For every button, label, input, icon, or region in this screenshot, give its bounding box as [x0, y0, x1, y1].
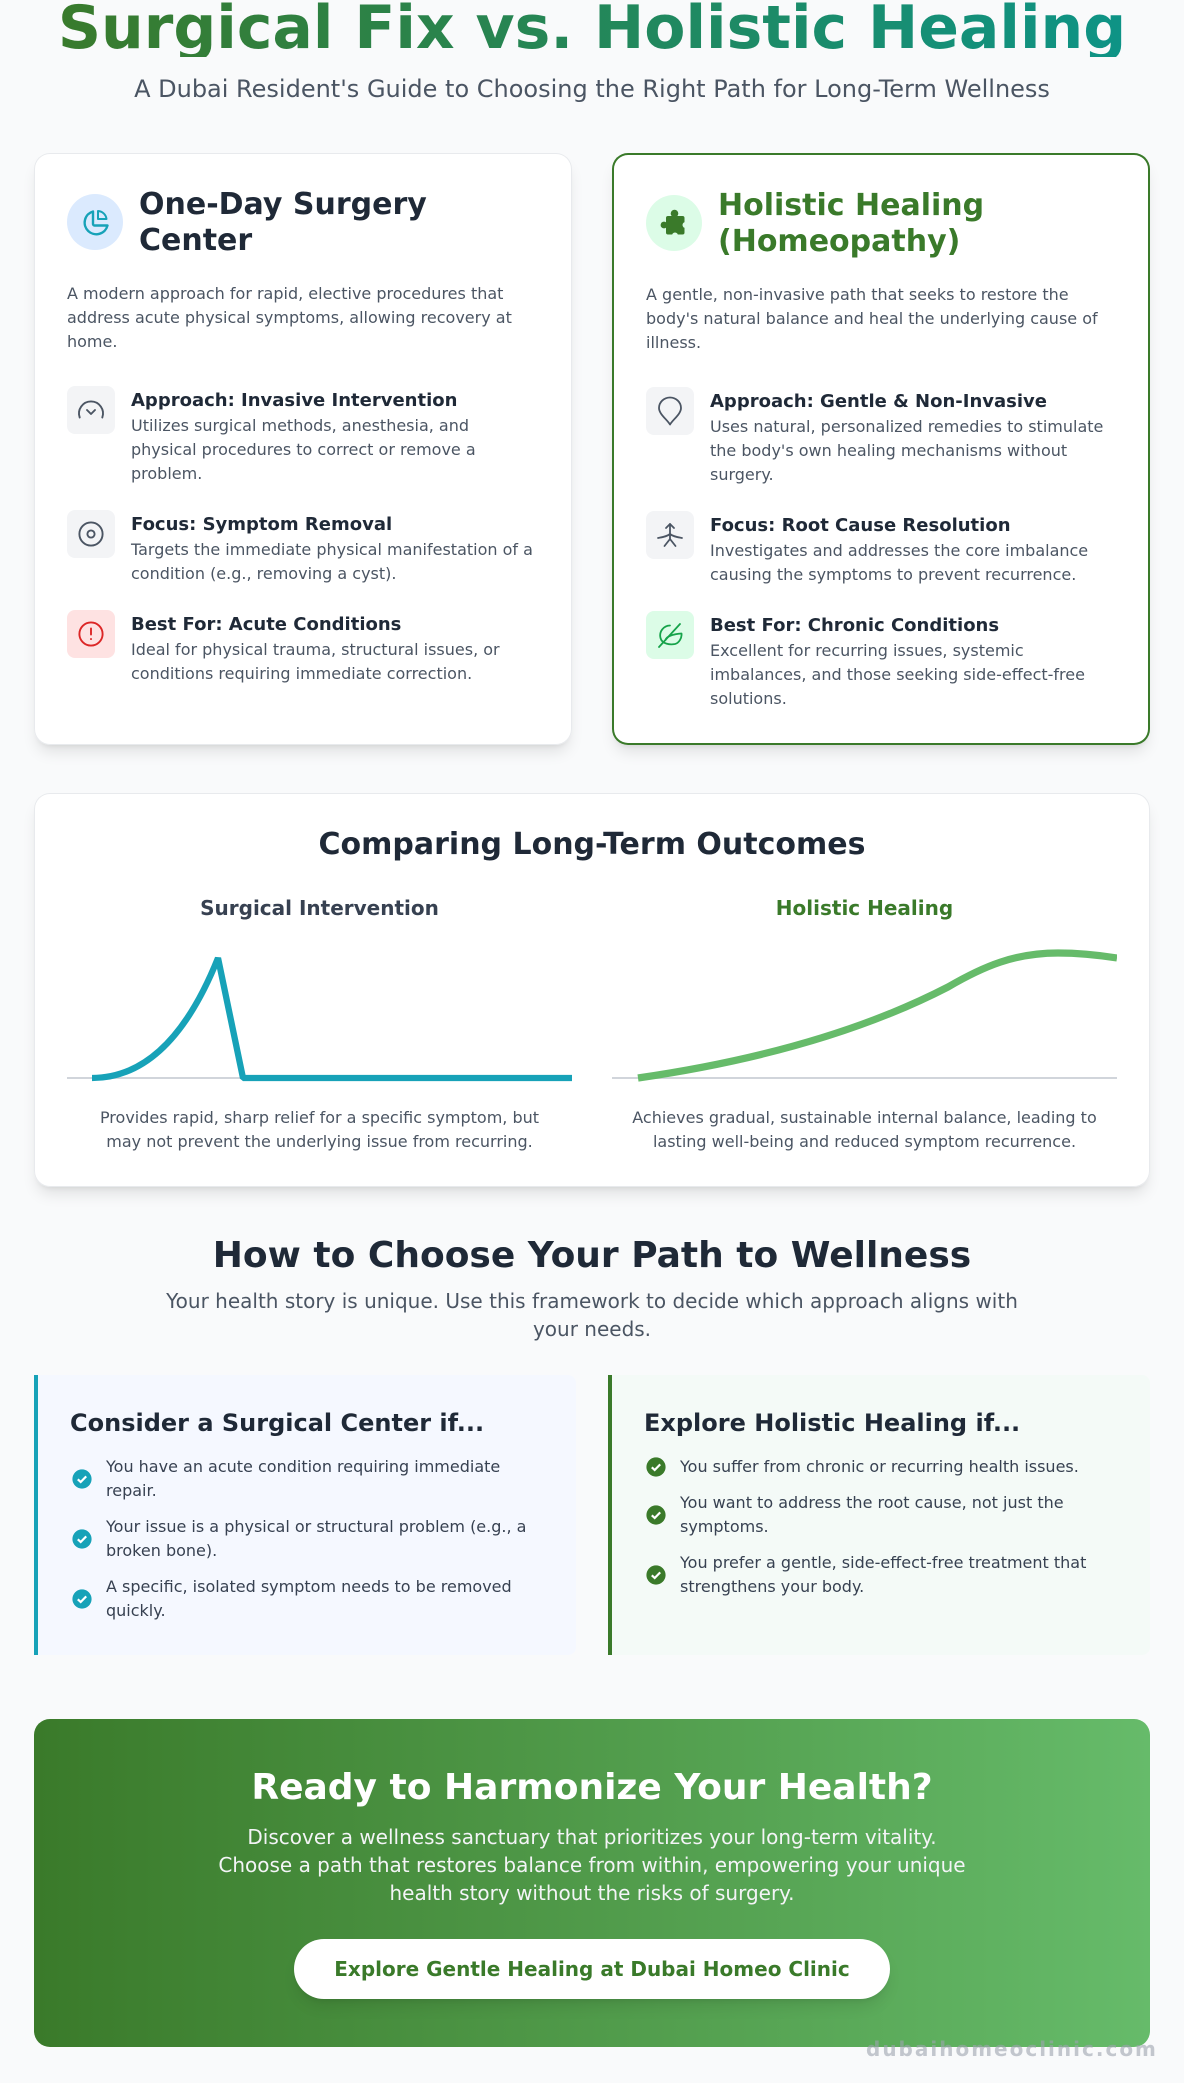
list text: strengthens your body.	[680, 1577, 864, 1596]
heading: surgery center	[139, 187, 427, 258]
chart caption	[100, 1108, 539, 1151]
item text	[131, 416, 476, 483]
icon: target	[67, 510, 115, 558]
icon: check	[646, 1565, 666, 1585]
item text: solutions.	[710, 689, 787, 708]
list item	[72, 1577, 512, 1620]
icon: check	[72, 1589, 92, 1609]
cta text: Choose a path that restores balance from within, empowering your unique	[218, 1853, 966, 1877]
description: A gentle, non-invasive path that seeks to restore the	[646, 285, 1069, 304]
chart heading: Surgical Intervention	[200, 896, 439, 920]
list text: repair.	[106, 1481, 157, 1500]
heading: surgery center: One-Day Surgery	[139, 187, 427, 222]
list item	[72, 1517, 526, 1560]
item: best for	[646, 611, 1085, 708]
item text: Investigates and addresses the core imbalance	[710, 541, 1088, 560]
item text: Utilizes surgical methods, anesthesia, and	[131, 416, 469, 435]
heading: holistic healing	[718, 188, 984, 259]
item: focus	[646, 511, 1088, 584]
list item	[646, 1457, 1079, 1477]
item text: imbalances, and those seeking side-effect-free	[710, 665, 1085, 684]
cta text: Discover a wellness sanctuary that prioritizes your long-term vitality.	[247, 1825, 937, 1849]
item title: Focus: Symptom Removal	[131, 514, 392, 535]
item: approach	[646, 387, 1103, 484]
chart caption: may not prevent the underlying issue from recurring.	[106, 1132, 533, 1151]
item: focus	[67, 510, 533, 583]
item text	[131, 640, 500, 683]
item text: Targets the immediate physical manifestation of a	[131, 540, 533, 559]
list text: You want to address the root cause, not just the	[680, 1493, 1064, 1512]
list text	[680, 1553, 1086, 1596]
panel: one-day surgery center	[34, 153, 572, 745]
list text	[680, 1493, 1064, 1536]
icon: alert	[67, 610, 115, 658]
panel: holistic healing	[612, 153, 1150, 745]
intro text	[166, 1289, 1018, 1341]
cta heading: Ready to Harmonize Your Health?	[251, 1767, 933, 1808]
item text: the body's own healing mechanisms without	[710, 441, 1067, 460]
subtitle: A Dubai Resident's Guide to Choosing the Right Path for Long-Term Wellness	[134, 75, 1050, 103]
item text: Uses natural, personalized remedies to stimulate	[710, 417, 1103, 436]
item text: Ideal for physical trauma, structural issues, or	[131, 640, 500, 659]
chart caption	[632, 1108, 1097, 1151]
item text	[710, 417, 1103, 484]
item text	[130, 540, 533, 583]
watermark: dubaihomeoclinic.com	[866, 2037, 1158, 2061]
list text: broken bone).	[106, 1541, 217, 1560]
icon: leaf	[646, 611, 694, 659]
icon: drop	[646, 387, 694, 435]
panel: comparing long-term outcomes	[34, 793, 1150, 1187]
column: holistic healing	[612, 896, 1117, 1151]
heading: holistic healing: Holistic Healing	[718, 188, 984, 223]
intro text: Your health story is unique. Use this framework to decide which approach aligns with	[166, 1289, 1018, 1313]
description: address acute physical symptoms, allowing recovery at	[67, 308, 512, 327]
item title: Focus: Root Cause Resolution	[710, 515, 1011, 536]
list item	[646, 1493, 1064, 1536]
chart: gradual rise	[612, 949, 1117, 1082]
heading: holistic healing: (Homeopathy)	[718, 224, 960, 259]
cta text: health story without the risks of surgery.	[389, 1881, 795, 1905]
heading: surgery center: Center	[139, 223, 252, 258]
item: approach	[67, 386, 476, 483]
list text: A specific, isolated symptom needs to be removed	[106, 1577, 512, 1596]
item text: problem.	[131, 464, 202, 483]
heading: how to choose: How to Choose Your Path to Wellness	[213, 1235, 971, 1276]
list text	[106, 1457, 500, 1500]
list text: You prefer a gentle, side-effect-free treatment that	[680, 1553, 1086, 1572]
list text: You suffer from chronic or recurring health issues.	[680, 1457, 1079, 1476]
cta button	[294, 1939, 890, 1999]
intro text: your needs.	[533, 1317, 651, 1341]
panel: explore holistic healing	[608, 1375, 1150, 1655]
chart caption: lasting well-being and reduced symptom recurrence.	[653, 1132, 1076, 1151]
icon: puzzle piece	[646, 195, 702, 251]
heading: comparing outcomes: Comparing Long-Term Outcomes	[319, 827, 865, 862]
icon: pie chart	[67, 194, 123, 250]
icon: check	[72, 1469, 92, 1489]
item text: surgery.	[710, 465, 774, 484]
item title: Best For: Acute Conditions	[131, 614, 401, 635]
cta button: Explore Gentle Healing at Dubai Homeo Clinic	[334, 1957, 850, 1981]
list item	[72, 1457, 500, 1500]
panel heading: Consider a Surgical Center if...	[70, 1409, 484, 1437]
item: best for	[67, 610, 500, 683]
description: home.	[67, 332, 117, 351]
list text: symptoms.	[680, 1517, 769, 1536]
icon: gauge	[67, 386, 115, 434]
chart caption: Achieves gradual, sustainable internal balance, leading to	[632, 1108, 1097, 1127]
item text	[710, 641, 1085, 708]
list text: You have an acute condition requiring immediate	[106, 1457, 500, 1476]
item title: Approach: Gentle & Non-Invasive	[710, 391, 1047, 412]
panel heading: Explore Holistic Healing if...	[644, 1409, 1020, 1437]
description	[646, 285, 1098, 352]
item text	[710, 541, 1088, 584]
list text: Your issue is a physical or structural problem (e.g., a	[106, 1517, 526, 1536]
description: body's natural balance and heal the underlying cause of	[646, 309, 1098, 328]
list text	[106, 1517, 526, 1560]
item text: physical procedures to correct or remove a	[131, 440, 476, 459]
icon: roots	[646, 511, 694, 559]
description: illness.	[646, 333, 701, 352]
description: A modern approach for rapid, elective procedures that	[67, 284, 503, 303]
item title: Approach: Invasive Intervention	[131, 390, 457, 411]
list item	[646, 1553, 1086, 1596]
cta text	[34, 1823, 1150, 1907]
icon: check	[646, 1505, 666, 1525]
icon: check	[72, 1529, 92, 1549]
item title: Best For: Chronic Conditions	[710, 615, 999, 636]
item text: conditions requiring immediate correction.	[131, 664, 472, 683]
panel: call to action	[34, 1719, 1150, 2047]
list text	[106, 1577, 512, 1620]
item text: causing the symptoms to prevent recurrence.	[710, 565, 1076, 584]
icon: check	[646, 1457, 666, 1477]
description	[67, 284, 512, 351]
chart: surgical spike	[67, 956, 572, 1082]
panel: consider a surgical center	[34, 1375, 576, 1655]
item text: condition (e.g., removing a cyst).	[131, 564, 396, 583]
list text: quickly.	[106, 1601, 166, 1620]
item text: Excellent for recurring issues, systemic	[710, 641, 1024, 660]
chart heading: Holistic Healing	[776, 896, 953, 920]
column: surgical intervention	[67, 896, 572, 1151]
chart caption: Provides rapid, sharp relief for a specific symptom, but	[100, 1108, 539, 1127]
